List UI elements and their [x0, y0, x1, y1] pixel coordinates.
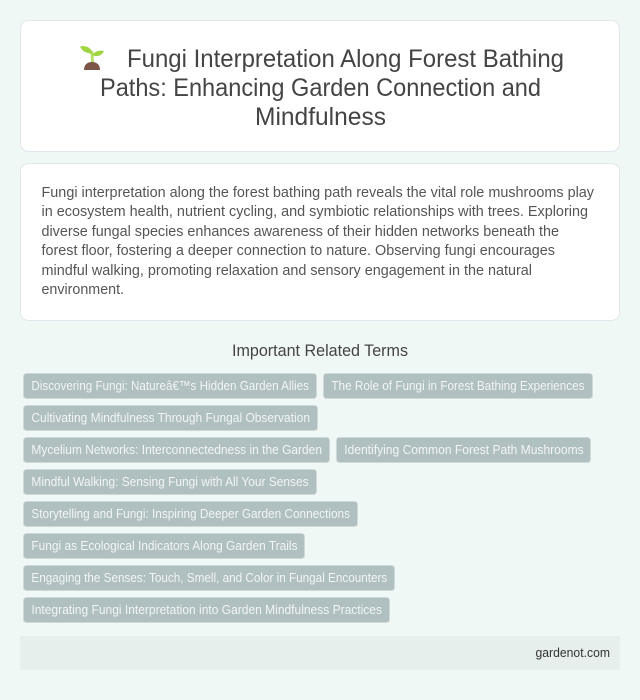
text block: description: in ecosystem health, nutrient cycling, and symbiotic relationships with trees. Exploring	[42, 204, 588, 220]
tag: discovering fungi: Discovering Fungi: Natureâ€™s Hidden Garden Allies	[31, 378, 309, 393]
tag: identifying mushrooms: Identifying Common Forest Path Mushrooms	[344, 442, 584, 457]
footer: gardenot.com	[536, 645, 610, 660]
tag: mycelium networks: Mycelium Networks: Interconnectedness in the Garden	[31, 442, 322, 457]
text block: description	[42, 185, 595, 298]
text block: description: mindful walking, promoting relaxation and sensory engagement in the natural	[42, 263, 532, 279]
panel: title card	[20, 20, 620, 152]
text block: description: environment.	[42, 282, 124, 298]
text block: description: forest floor, fostering a deeper connection to nature. Observing fungi encourages	[42, 243, 555, 259]
title: Mindfulness	[255, 103, 386, 131]
tag: ecological indicators: Fungi as Ecological Indicators Along Garden Trails	[31, 538, 298, 553]
text block: description: Fungi interpretation along the forest bathing path reveals the vital role mushrooms play	[42, 185, 595, 201]
tag: integrating interpretation	[24, 598, 390, 622]
tag: cultivating mindfulness	[24, 406, 318, 430]
tag: storytelling	[24, 502, 358, 526]
tag: storytelling: Storytelling and Fungi: Inspiring Deeper Garden Connections	[31, 506, 350, 521]
tag: engaging the senses	[24, 566, 394, 590]
tag: mindful walking: Mindful Walking: Sensing Fungi with All Your Senses	[31, 474, 309, 489]
heading: related terms: Important Related Terms	[232, 341, 408, 360]
text block: description: diverse fungal species enhances awareness of their hidden networks beneath the	[42, 224, 559, 240]
tag: discovering fungi	[24, 374, 316, 398]
title: Fungi Interpretation Along Forest Bathing	[127, 45, 564, 73]
tag: role of fungi	[324, 374, 592, 398]
panel: description	[20, 164, 620, 320]
tag: engaging the senses: Engaging the Senses: Touch, Smell, and Color in Fungal Encounters	[31, 570, 388, 585]
title: Paths: Enhancing Garden Connection and	[100, 74, 541, 102]
icon: seedling	[80, 46, 104, 70]
panel: related term tags	[24, 374, 592, 622]
tag: mycelium networks	[24, 438, 330, 462]
tag: ecological indicators	[24, 534, 304, 558]
tag: integrating interpretation: Integrating Fungi Interpretation into Garden Mindfulness Practices	[31, 602, 382, 617]
tag: identifying mushrooms	[336, 438, 590, 462]
tag: cultivating mindfulness: Cultivating Mindfulness Through Fungal Observation	[31, 410, 310, 425]
tag: role of fungi: The Role of Fungi in Forest Bathing Experiences	[331, 378, 585, 393]
footer	[20, 636, 620, 670]
title	[100, 45, 564, 131]
tag: mindful walking	[24, 470, 316, 494]
